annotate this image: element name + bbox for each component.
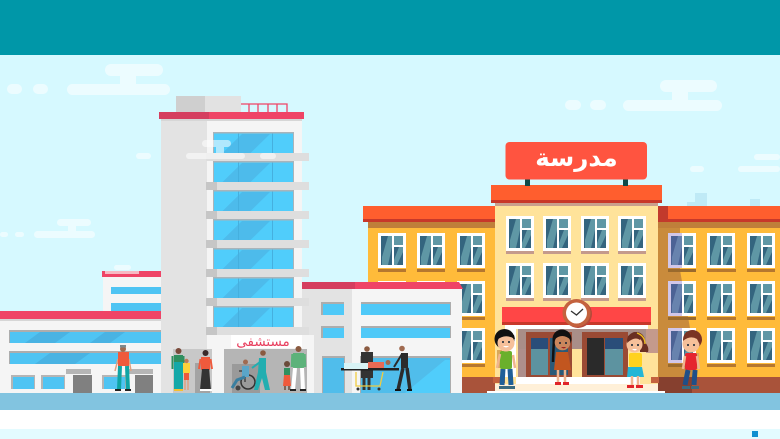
school entrance — [505, 325, 658, 378]
person: man in green shirt — [290, 346, 306, 391]
school: left wing — [363, 206, 495, 393]
distant skyline — [687, 193, 760, 206]
school sign — [506, 142, 647, 186]
top banner — [0, 0, 780, 55]
child: girl in brown dress — [552, 330, 572, 385]
child: girl in yellow shirt — [626, 332, 648, 388]
clouds over tower — [186, 140, 276, 159]
hospital: right wing — [302, 282, 463, 393]
school sign: مدرسة — [535, 143, 618, 172]
hospital entrance — [173, 335, 314, 393]
school: centre block — [491, 185, 662, 393]
school: right wing — [658, 206, 780, 393]
school awning — [502, 307, 651, 325]
child: boy in green shirt — [494, 329, 515, 389]
person: wheelchair patient and nurse — [232, 350, 270, 390]
child: boy in red shirt — [682, 330, 702, 389]
hospital sign: مستشفى — [236, 334, 290, 350]
ground road — [0, 393, 780, 410]
person: woman in black skirt — [199, 350, 212, 391]
person: child in yellow — [183, 359, 190, 390]
bottom band — [0, 429, 780, 439]
white strip — [0, 410, 780, 429]
clouds — [0, 64, 780, 270]
hospital: rear wing — [102, 271, 161, 312]
person: man in red shirt — [115, 345, 131, 391]
person: girl in orange — [283, 361, 291, 390]
hospital: left low wing — [0, 311, 161, 393]
school steps — [487, 377, 665, 393]
person: paramedics with stretcher — [341, 346, 412, 391]
clock — [562, 299, 592, 328]
person: woman in green — [172, 348, 184, 391]
hospital: main tower — [159, 96, 309, 393]
small blue square — [752, 431, 758, 437]
